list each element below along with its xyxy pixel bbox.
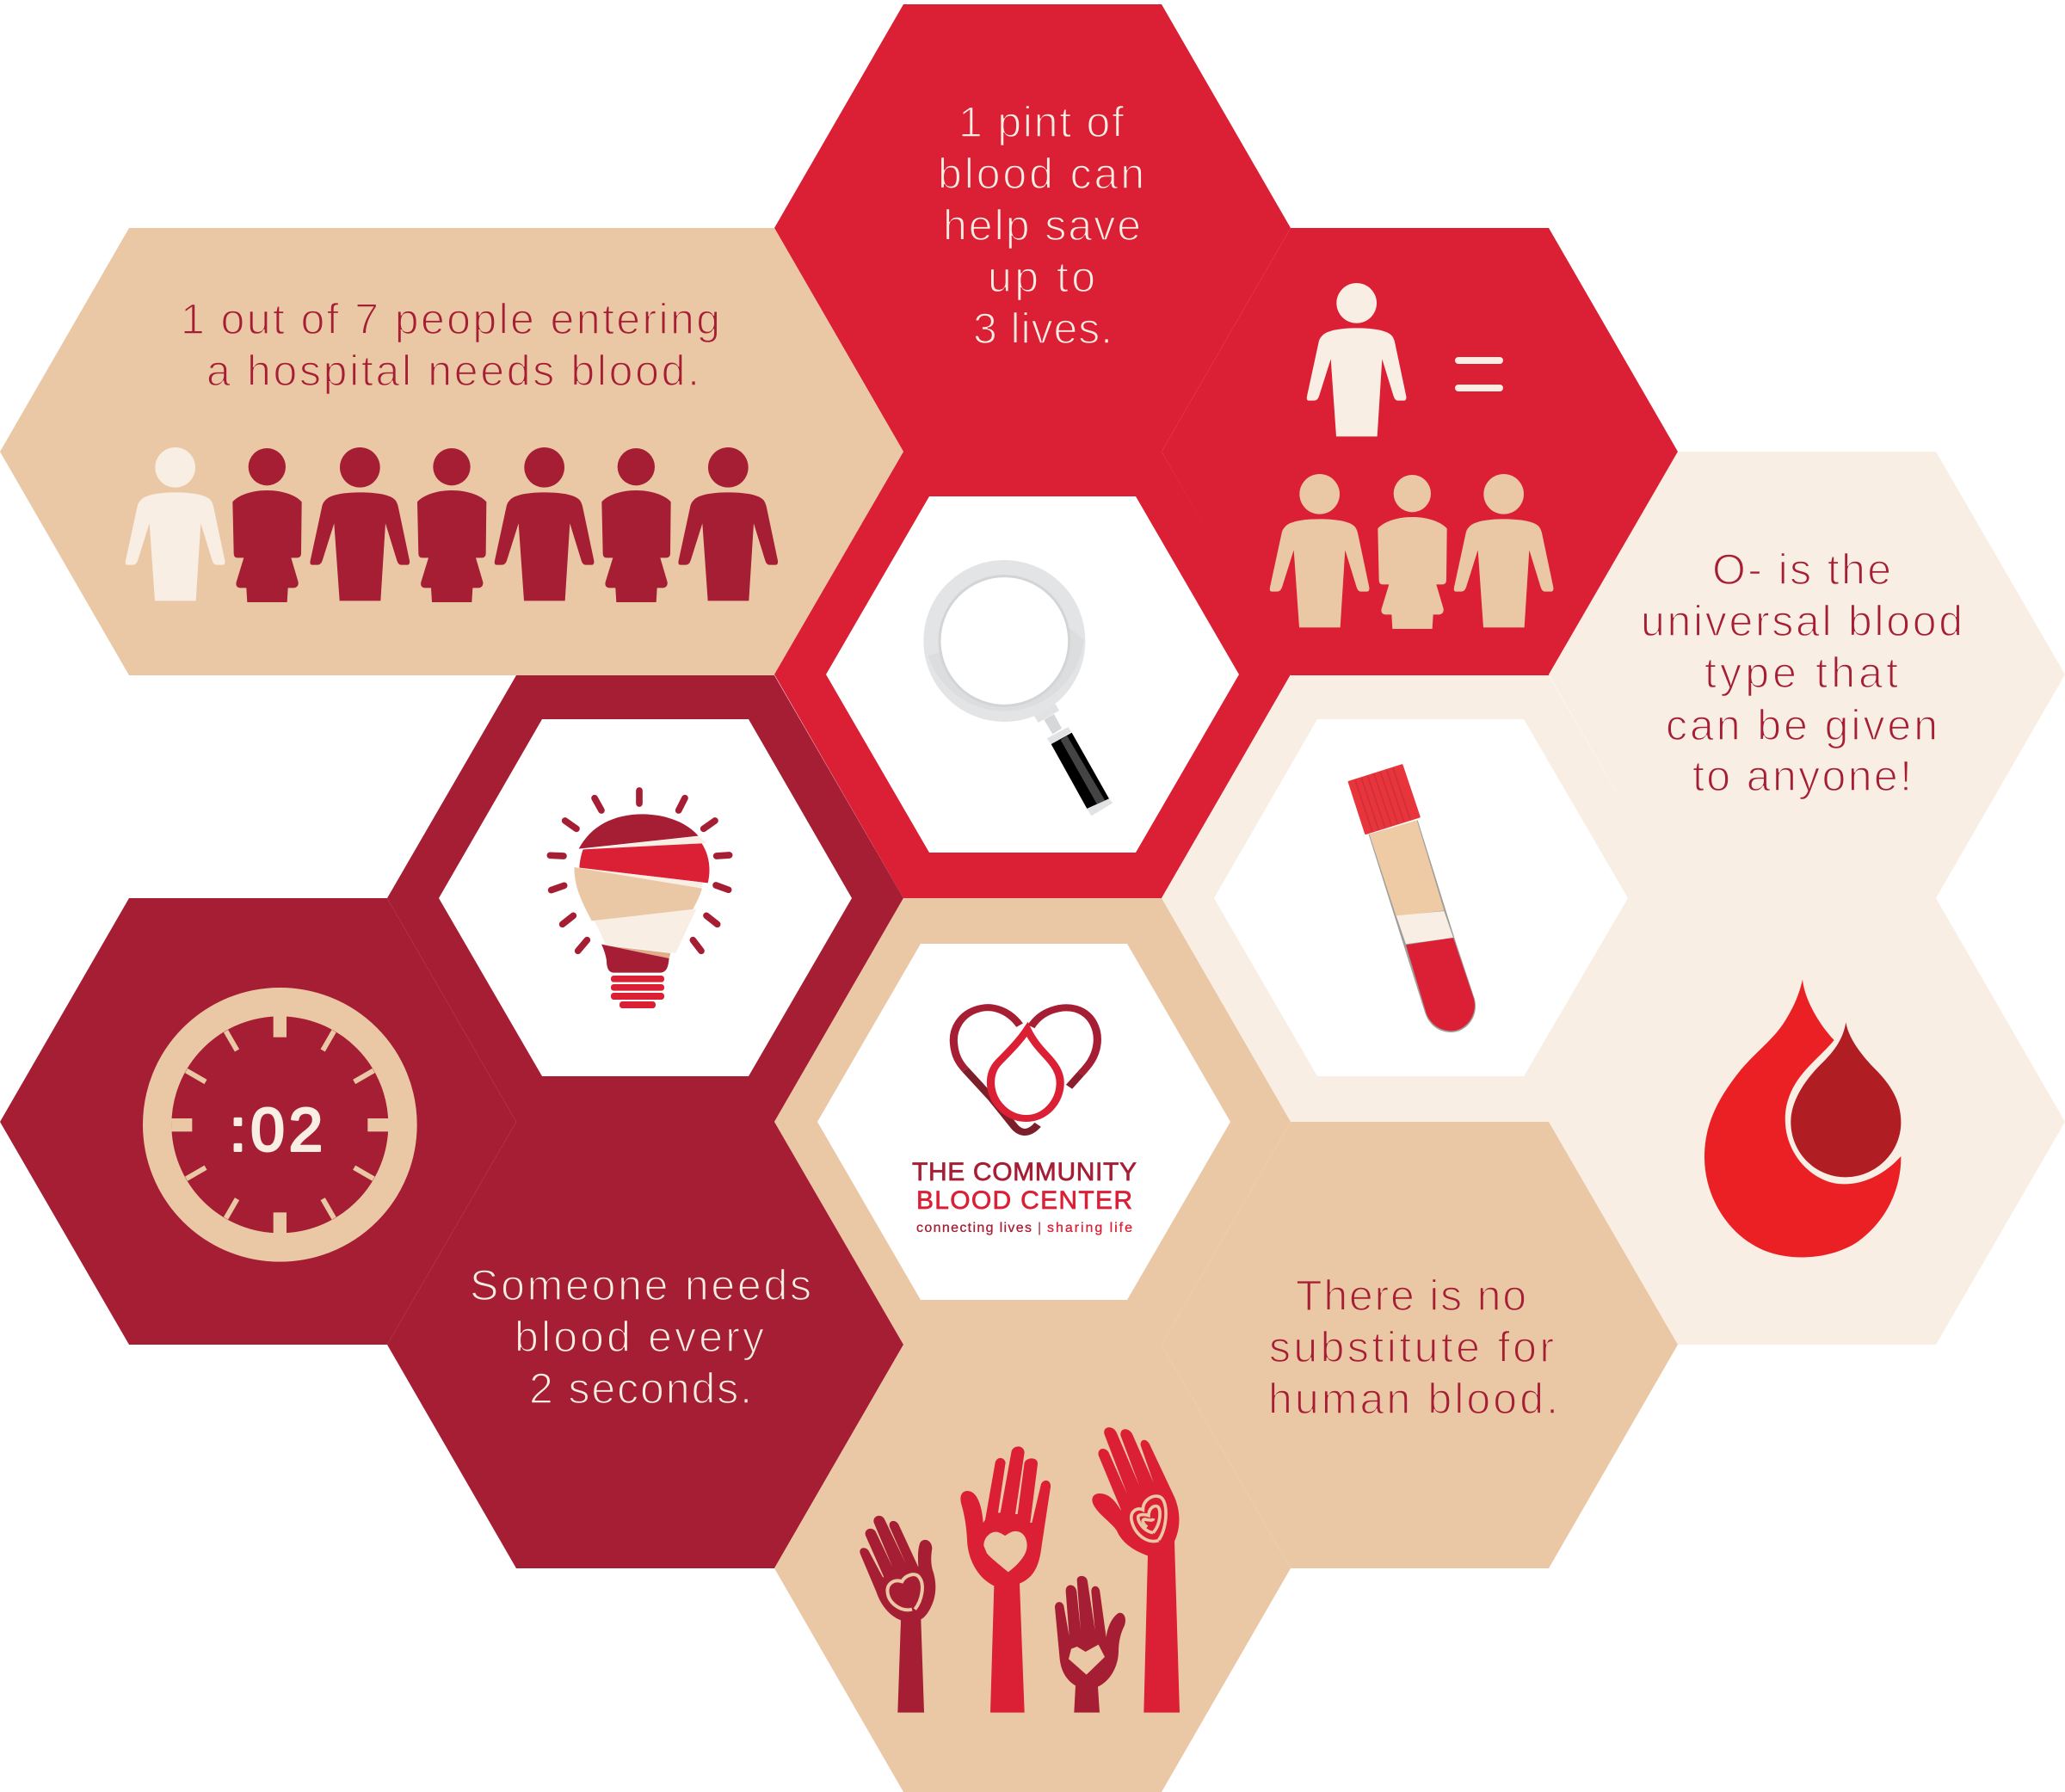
text: there is no substitute for human blood: substitute for	[1269, 1323, 1554, 1371]
panel: someone needs blood	[387, 1122, 903, 1568]
text: 1 out of 7 people entering a hospital needs blood	[181, 295, 720, 395]
text: 1 pint of blood can help save up to 3 lives	[938, 98, 1144, 353]
logo wordmark: sharing life	[1047, 1221, 1132, 1235]
panel: test tube	[1162, 675, 1678, 1122]
logo: heart and drop	[953, 1007, 1097, 1132]
text: 1 pint of blood can help save up to 3 lives: blood can	[938, 150, 1144, 198]
text: someone needs blood every 2 seconds	[470, 1261, 811, 1413]
text: someone needs blood every 2 seconds: Someone needs	[470, 1261, 811, 1309]
icon: four raised hands with hearts	[860, 1427, 1180, 1713]
text: there is no substitute for human blood: There is no	[1296, 1272, 1526, 1320]
text: O- is the universal blood type: can be given	[1666, 701, 1938, 749]
text: O- is the universal blood type: to anyone!	[1692, 752, 1912, 800]
panel: clock	[0, 898, 516, 1345]
panel: one donor equals three people	[1162, 228, 1678, 675]
icon: equals sign	[1455, 357, 1503, 391]
logo wordmark: BLOOD CENTER	[916, 1186, 1132, 1215]
text: O- is the universal blood type: universal blood	[1641, 597, 1963, 645]
text: 1 pint of blood can help save up to 3 lives: up to	[988, 253, 1095, 301]
icon: three recipients	[1270, 474, 1553, 629]
text: 1 pint of blood can help save up to 3 lives: 3 lives.	[973, 305, 1113, 353]
icon: blood test tube	[1349, 766, 1476, 1032]
icon: row of seven people	[126, 447, 778, 602]
icon: stopwatch showing 02	[157, 1002, 403, 1247]
text: 1 pint of blood can help save up to 3 lives: help save	[943, 201, 1141, 249]
panel: blood drop	[1549, 898, 2065, 1345]
icon: single donor	[1307, 283, 1406, 436]
text: someone needs blood every 2 seconds: blood every	[515, 1313, 764, 1361]
icon: light bulb with rays	[550, 791, 730, 1008]
logo wordmark: connecting lives	[916, 1221, 1032, 1235]
text: O- is the universal blood type: O- is the	[1712, 545, 1891, 594]
logo wordmark: |	[1038, 1221, 1041, 1235]
logo wordmark	[912, 1158, 1137, 1235]
panel: O- universal blood type	[1549, 452, 2065, 898]
panel: raised hands	[774, 1345, 1291, 1792]
text: O- is the universal blood type: type that	[1704, 649, 1898, 697]
text: 1 out of 7 people entering a hospital needs blood: 1 out of 7 people entering	[181, 295, 720, 343]
panel: no substitute	[1162, 1122, 1678, 1568]
icon: magnifying glass	[928, 568, 1113, 816]
text: there is no substitute for human blood	[1268, 1272, 1558, 1423]
clock readout: :02	[230, 1095, 323, 1163]
panel: community blood center logo	[774, 898, 1291, 1345]
panel: magnifier	[774, 452, 1291, 898]
text: 1 pint of blood can help save up to 3 lives: 1 pint of	[959, 98, 1124, 146]
text: O- is the universal blood type	[1641, 545, 1963, 800]
icon: two blood drops	[1704, 979, 1901, 1257]
text: there is no substitute for human blood: human blood.	[1268, 1375, 1558, 1423]
panel: 1 out of 7 people	[0, 228, 903, 675]
panel: 1 pint of blood	[774, 4, 1291, 452]
text: 1 out of 7 people entering a hospital needs blood: a hospital needs blood.	[206, 347, 700, 395]
panel: light bulb	[387, 675, 903, 1122]
text: someone needs blood every 2 seconds: 2 seconds.	[529, 1364, 752, 1413]
logo wordmark: THE COMMUNITY	[912, 1158, 1137, 1186]
